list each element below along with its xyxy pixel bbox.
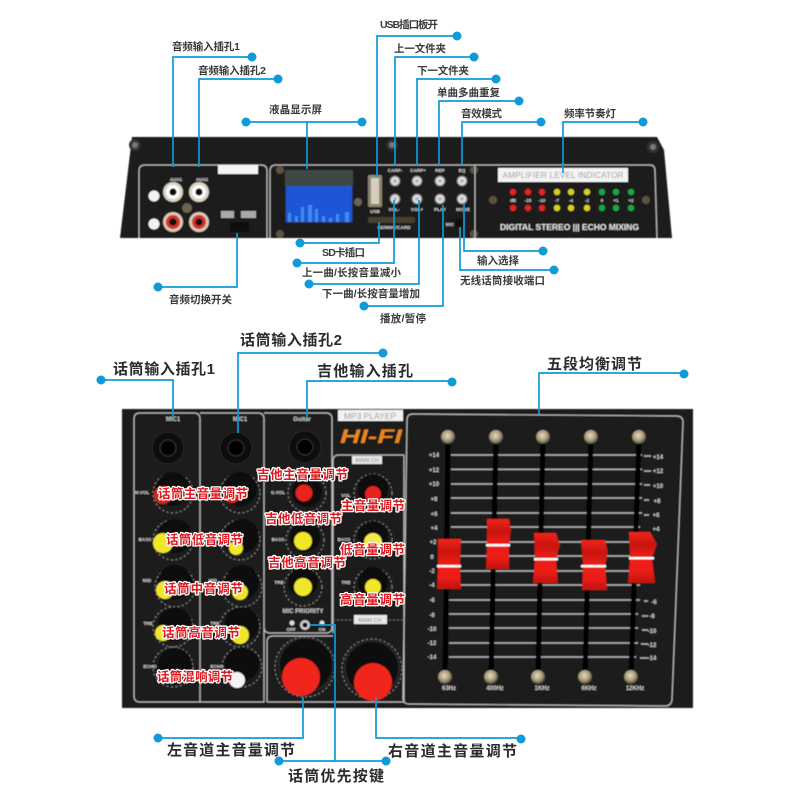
label: guitar bass: 吉他低音调节 <box>265 511 342 526</box>
label: mic treble: 话筒高音调节 <box>162 625 240 640</box>
level indicator: DIGITAL STEREO ||| ECHO MIXING <box>500 222 639 232</box>
AUX section: AUX1 <box>170 177 183 182</box>
mic priority switch: MIC PRIORITY <box>282 609 324 615</box>
callout: SD slot <box>296 222 379 259</box>
right scale: +8 <box>654 499 661 505</box>
brand logo: HI-FI <box>340 427 403 448</box>
label: guitar master volume: 吉他主音量调节 <box>257 467 348 482</box>
callout: effect mode: 音效模式 <box>461 107 502 120</box>
callout: wireless mic port <box>460 227 558 287</box>
left scale: 0 <box>430 555 434 561</box>
knobs: mic channel 1: ECHO <box>143 664 157 669</box>
control buttons: MODE <box>456 207 470 212</box>
channel names: Guitar <box>293 417 311 423</box>
callout: mic priority button: 话筒优先按键 <box>288 767 384 785</box>
level indicator: -15 <box>525 198 532 203</box>
left scale: -12 <box>428 641 437 647</box>
callout: next folder: 下一文件夹 <box>417 64 470 77</box>
callout: left channel master <box>154 697 303 759</box>
control buttons: PLAY <box>434 207 446 212</box>
USB port and SD slot: USB <box>370 209 381 214</box>
frequency labels: 6KHz <box>581 686 597 692</box>
callout: play pause <box>360 205 443 325</box>
brand logo <box>338 410 403 624</box>
knobs: mic channel 1 <box>135 472 195 687</box>
right scale: +4 <box>653 527 660 533</box>
control buttons: CARP+ <box>410 168 426 173</box>
frequency labels <box>442 686 644 692</box>
top and bottom screws <box>438 430 646 684</box>
right scale: +12 <box>653 469 664 475</box>
channel names: MIC1 <box>233 417 248 423</box>
frequency labels: 400Hz <box>486 686 504 692</box>
callout: USB port: USB插口板开 <box>380 18 438 31</box>
control buttons: REP <box>435 168 445 173</box>
brand logo: MAIN CH <box>355 458 379 464</box>
level indicator: dB <box>510 198 517 203</box>
knobs: guitar: BASS <box>272 537 284 542</box>
frequency labels: 1KHz <box>534 686 550 692</box>
control buttons <box>388 168 470 227</box>
left scale: +2 <box>430 540 437 546</box>
right scale: +14 <box>653 455 664 461</box>
LCD display <box>285 170 353 223</box>
right scale: -6 <box>651 600 657 606</box>
frequency labels: 12KHz <box>626 686 644 692</box>
callout: previous track: 上一曲/长按音量减小 <box>302 266 402 279</box>
mic priority switch: OFF <box>286 627 296 632</box>
red faders <box>437 519 657 590</box>
right scale: -12 <box>648 643 657 649</box>
callout: audio switch <box>154 233 237 306</box>
callout: mic input 2: 话筒输入插孔2 <box>240 331 342 349</box>
knobs: guitar: TRE <box>274 580 284 585</box>
EQ outline <box>403 414 683 706</box>
callout: audio switch: 音频切换开关 <box>169 293 232 306</box>
left scale: -6 <box>429 598 435 604</box>
callout: next folder <box>417 64 500 165</box>
callout: rhythm light <box>563 107 648 173</box>
section outlines <box>134 413 405 702</box>
right scale: -8 <box>649 614 655 620</box>
knobs: mic channel 1: MID <box>143 578 152 583</box>
callout: previous track <box>292 200 402 279</box>
label: master volume: 主音量调节 <box>341 498 405 513</box>
mixer panel: bottom unit <box>122 409 693 708</box>
callout: play pause: 播放/暂停 <box>380 312 426 325</box>
callout: guitar input <box>307 362 456 418</box>
left scale: +14 <box>429 453 440 459</box>
callout: rhythm light: 频率节奏灯 <box>564 107 616 120</box>
label: treble volume: 高音量调节 <box>340 592 405 607</box>
callout: five band EQ: 五段均衡调节 <box>547 355 642 373</box>
right scale: -10 <box>648 629 657 635</box>
left scale: -8 <box>429 613 435 619</box>
equalizer section <box>403 414 683 706</box>
callout: next track <box>304 200 420 300</box>
callout: previous folder <box>394 42 478 165</box>
callout: left channel master: 左音道主音量调节 <box>167 741 295 759</box>
knobs: mic channel 2: BASS <box>206 537 218 542</box>
panel screws <box>129 139 659 238</box>
left scale: -10 <box>428 627 437 633</box>
input jacks <box>152 431 321 464</box>
control buttons: MIC <box>446 222 455 227</box>
callout: previous folder: 上一文件夹 <box>394 42 446 55</box>
callout: input select <box>464 203 548 267</box>
left scale <box>428 453 440 661</box>
control buttons: VOL- <box>389 207 400 212</box>
callout: mic input 2 <box>238 331 388 433</box>
level indicator <box>475 165 657 238</box>
knobs: mic channel 2 <box>203 472 262 688</box>
callout: wireless mic port: 无线话筒接收端口 <box>460 274 545 287</box>
USB port and SD slot: SD/MMC/CARD <box>377 225 411 230</box>
left scale: -4 <box>429 583 435 589</box>
label: mic mid: 话筒中音调节 <box>164 581 243 596</box>
fader tracks <box>445 437 639 677</box>
panel body <box>120 137 672 238</box>
knobs: mic channel 2: M.VOL <box>203 490 217 495</box>
callout: mic input 1: 话筒输入插孔1 <box>113 360 215 378</box>
large master knobs <box>275 637 402 701</box>
scale rails <box>449 455 651 658</box>
knobs: mic channel 2: TRE <box>210 621 220 626</box>
callout: right channel master <box>376 697 526 760</box>
AUX section <box>139 165 267 238</box>
media section outline <box>270 165 475 238</box>
callout: effect mode <box>461 107 546 165</box>
left scale: +10 <box>429 482 440 488</box>
left scale: +12 <box>429 468 440 474</box>
callout: mic priority button <box>274 625 390 785</box>
callout: LCD screen <box>242 103 366 169</box>
brand logo: MP3 PLAYEP <box>344 411 396 421</box>
USB port and SD slot <box>368 175 415 230</box>
callouts: mixer <box>96 331 688 785</box>
mic priority switch <box>282 609 326 632</box>
callout: LCD screen: 液晶显示屏 <box>269 103 322 116</box>
knobs: mic channel 1: BASS <box>139 537 151 542</box>
channel names <box>166 417 311 423</box>
callouts: top unit <box>154 18 648 325</box>
right scale: -14 <box>648 656 657 662</box>
label: bass volume: 低音量调节 <box>340 542 405 557</box>
left scale: +8 <box>431 497 438 503</box>
callout: right channel master: 右音道主音量调节 <box>388 742 517 760</box>
panel body <box>122 409 693 708</box>
knobs: mic channel 1: TRE <box>143 621 153 626</box>
callout: repeat <box>437 86 524 165</box>
red function labels <box>157 467 405 684</box>
right scale: +6 <box>653 513 660 519</box>
callout: audio input 2: 音频输入插孔2 <box>198 64 266 77</box>
right scale <box>648 455 664 662</box>
level indicator: -2 <box>585 198 589 203</box>
brand logo: MAIN CH <box>358 618 382 624</box>
callout: audio input 2 <box>198 64 282 167</box>
level indicator: AMPLIFIER LEVEL INDICATOR <box>502 170 624 180</box>
level indicator: -4 <box>569 198 573 203</box>
knobs: main channel: VOL <box>341 493 351 498</box>
knobs: main channel <box>338 474 392 606</box>
frequency labels: 63Hz <box>442 686 456 692</box>
knobs: mic channel 2: ECHO <box>210 664 224 669</box>
knobs: guitar <box>271 474 326 606</box>
left scale: +4 <box>431 526 438 532</box>
level indicator: -10 <box>539 198 546 203</box>
left scale: +6 <box>431 512 438 518</box>
callout: input select: 输入选择 <box>477 254 520 267</box>
left scale: -14 <box>428 655 437 661</box>
control buttons: VOL+ <box>411 207 423 212</box>
callout: repeat: 单曲多曲重复 <box>437 86 500 99</box>
level indicator: +2 <box>628 198 634 203</box>
AUX section: AUX2 <box>196 177 209 182</box>
level indicator: +1 <box>613 198 619 203</box>
callout: next track: 下一曲/长按音量增加 <box>322 287 420 300</box>
callout: SD slot: SD卡插口 <box>322 246 365 259</box>
knobs: main channel: TRE <box>341 580 351 585</box>
callout: audio input 1 <box>172 40 256 167</box>
label: mic echo: 话筒混响调节 <box>157 669 233 684</box>
knobs: mic channel 2: MID <box>209 578 218 583</box>
right scale: +10 <box>653 484 664 490</box>
callout: mic input 1 <box>96 360 215 418</box>
channel names: MIC1 <box>166 417 181 423</box>
label: mic bass: 话筒低音调节 <box>166 532 243 547</box>
knobs: main channel: BASS <box>338 537 350 542</box>
label: guitar treble: 吉他高音调节 <box>268 555 346 570</box>
control buttons: CARP- <box>388 168 403 173</box>
knobs: guitar: G.VOL <box>271 490 285 495</box>
rear panel: top amplifier unit <box>120 137 672 238</box>
left scale: -2 <box>429 569 435 575</box>
level indicator: 0 <box>601 198 604 203</box>
label: mic master volume: 话筒主音量调节 <box>158 486 248 501</box>
callout: audio input 1: 音频输入插孔1 <box>172 40 240 53</box>
callout: USB port <box>377 18 462 177</box>
callout: five band EQ <box>539 355 688 414</box>
knobs: mic channel 1: M.VOL <box>135 490 149 495</box>
mic priority switch: ON <box>319 627 326 632</box>
level indicator: -7 <box>555 198 559 203</box>
control buttons: EQ <box>459 168 466 173</box>
callout: guitar input: 吉他输入插孔 <box>317 362 413 380</box>
